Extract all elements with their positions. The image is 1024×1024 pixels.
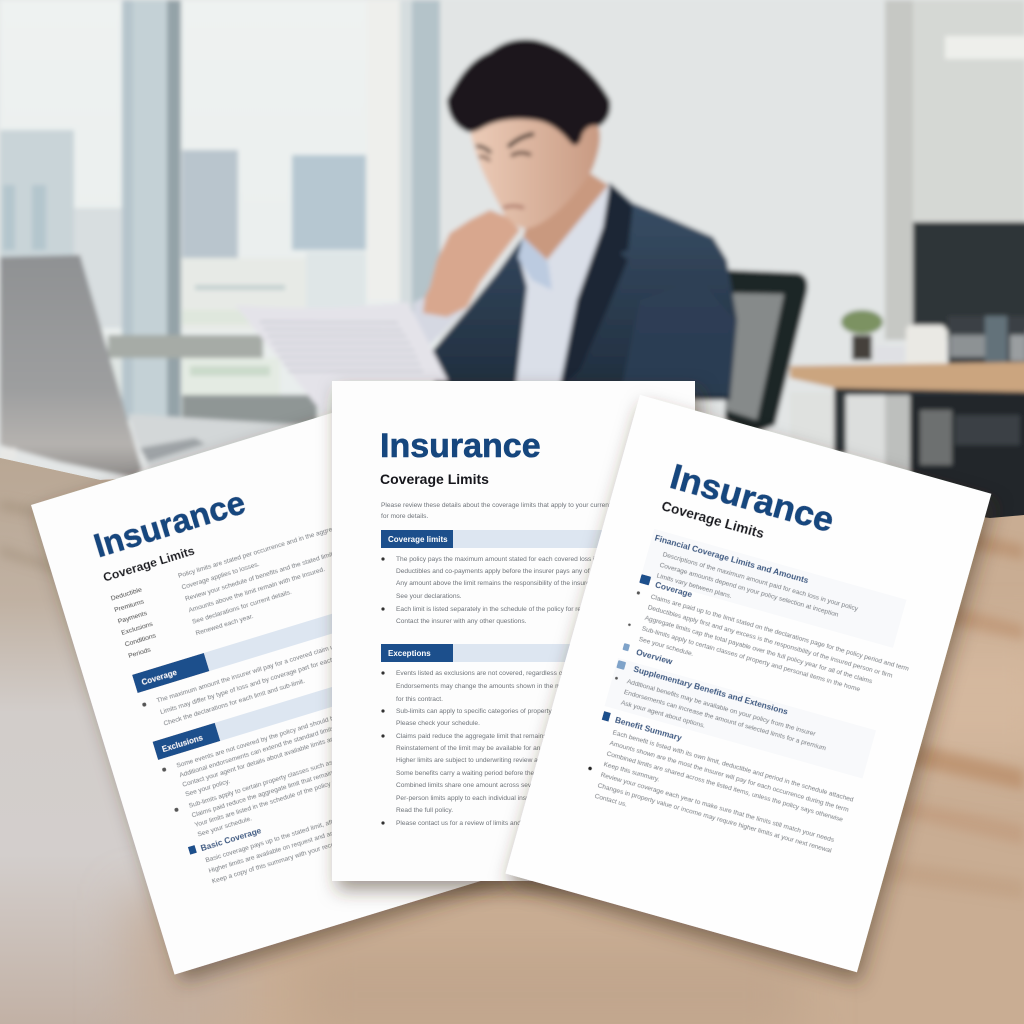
right document title: Insurance xyxy=(666,456,839,540)
left document section bar 2: Exclusions xyxy=(161,733,205,754)
left document summary table: Review your schedule of benefits and the stated limits for each of the insured items in the current policy term xyxy=(184,504,489,603)
right document section 1 text: Coverage amounts depend on your policy selection at inception xyxy=(659,562,840,619)
left document summary table: Premiums xyxy=(114,598,145,614)
centre document title: Insurance xyxy=(380,427,541,465)
left document section 1 text: Limits may differ by type of loss and by coverage part for each of the insured persons in the policy xyxy=(159,626,435,716)
centre document section 2 bullets: Events listed as exclusions are not covered, regardless of the limits in the policy and your schedule xyxy=(396,670,685,677)
centre document intro: for more details. xyxy=(381,513,428,520)
right document pale band 1 xyxy=(641,529,907,648)
left document section bar 1 xyxy=(132,588,423,693)
left document summary table: Renewed each year. xyxy=(195,613,255,637)
right document section 4 text xyxy=(581,726,855,867)
rear desk xyxy=(790,362,1024,527)
right document section 2 text: Claims are paid up to the limit stated on the declarations page for the policy period and term xyxy=(650,594,910,673)
right document section 2 text: Sub-limits apply to certain classes of property and personal items in the home xyxy=(641,625,861,693)
man: hand xyxy=(423,210,520,317)
right document section 4 text: Review your coverage each year to make sure that the limits still match your needs xyxy=(600,772,836,844)
centre document section 2 bullets: Per-person limits apply to each individual insured on the contract xyxy=(396,795,585,802)
right document section 2 text xyxy=(624,590,910,715)
centre document section 1 bullets: Any amount above the limit remains the responsibility of the insured person or company named here xyxy=(396,580,689,587)
centre document section bar 2: Exceptions xyxy=(388,649,431,658)
right document section 2 text: Aggregate limits cap the total payable over the full policy year for all of the claims xyxy=(644,615,874,686)
right document section 1 text: Limits vary between plans. xyxy=(656,572,733,600)
right document section 4 text: Contact us. xyxy=(594,793,628,809)
left document section 2 text xyxy=(161,663,525,843)
man: neck xyxy=(522,170,608,265)
right document icon heading: overview: Overview xyxy=(635,647,674,667)
right document section 3 text xyxy=(608,675,830,763)
centre document section 2 bullets: Endorsements may change the amounts shown in the main policy declarations for each year xyxy=(396,683,667,690)
left document summary table: Exclusions xyxy=(121,621,154,637)
table left glare xyxy=(0,458,200,1024)
centre document section 2 bullets: Please contact us for a review of limits and coverage terms. xyxy=(396,820,570,827)
right document section 4 text: Amounts shown are the most the insurer will pay for each occurrence during the term xyxy=(609,740,850,814)
left document summary table: Payments xyxy=(117,610,149,626)
man: shirt xyxy=(516,183,610,385)
right document section 4 text: Keep this summary. xyxy=(603,761,660,784)
centre document section 1 bullets xyxy=(381,556,721,625)
centre document section 1 bullets: Contact the insurer with any other questions. xyxy=(396,618,527,625)
right document section 2 text: See your schedule. xyxy=(638,636,694,658)
monitor on rear desk xyxy=(913,222,1024,330)
left document subtitle: Coverage Limits xyxy=(101,544,196,585)
centre document section 1 bullets: The policy pays the maximum amount stated for each covered loss in the period of insurance and for each item xyxy=(396,556,721,563)
right document icon heading: coverage: Coverage xyxy=(654,579,694,599)
centre document section 2 bullets: Reinstatement of the limit may be available for an added premium on the policy xyxy=(396,745,628,752)
left document summary table: Conditions xyxy=(124,632,157,648)
right document section 4 text: Each benefit is listed with its own limit, deductible and period in the schedule attached xyxy=(612,729,855,804)
left document section 2 text: Some events are not covered by the policy and should be reviewed before a claim is made to the insurer for payment xyxy=(176,663,504,770)
document: left xyxy=(31,376,596,975)
left document sub-heading: Basic Coverage xyxy=(199,825,263,853)
right document heading 2: Supplementary Benefits and Extensions xyxy=(632,664,790,717)
potted plant xyxy=(841,310,905,361)
centre document section bar 2 xyxy=(381,644,631,662)
left document closing text: Keep a copy of this summary with your records and review it each year xyxy=(211,818,412,885)
left document summary table: Policy limits are stated per occurrence and in the aggregate amount for each of the covered losses in the term xyxy=(177,479,486,580)
laptop xyxy=(0,255,320,490)
man: shirt cuff xyxy=(413,297,467,345)
centre document intro xyxy=(381,502,705,520)
left document closing text: Higher limits are available on request and are subject to underwriting review and terms of the insurer xyxy=(208,782,491,875)
centre document intro: Please review these details about the coverage limits that apply to your current insurance policy and your limits xyxy=(381,502,705,509)
right document section 4 text: Changes in property value or income may require higher limits at your next renewal xyxy=(597,782,833,855)
centre document section 1 bullets: Deductibles and co-payments apply before the insurer pays any of the remaining balance due on the claim xyxy=(396,568,707,575)
left document section 1 text: Check the declarations for each limit and sub-limit. xyxy=(163,678,306,728)
left document summary table xyxy=(109,479,504,660)
left document section 2 text: Contact your agent for details about available limits and options in your policy xyxy=(182,716,400,789)
right document section 3 text: Ask your agent about options. xyxy=(620,699,706,730)
centre document section bar 1: Coverage limits xyxy=(388,535,448,544)
man: suit xyxy=(433,183,737,400)
held paper xyxy=(235,302,448,416)
desk equipment under monitor xyxy=(948,316,1024,368)
centre document section 2 bullets: Read the full policy. xyxy=(396,807,453,814)
centre document section bar 1 xyxy=(381,530,631,548)
left document summary table: Coverage applies to losses. xyxy=(181,561,261,591)
wooden table xyxy=(0,458,1024,1024)
left document closing text: Basic coverage pays up to the stated limit, after the deductible has been met in full by the insured person xyxy=(205,768,499,864)
centre document section 2 bullets: Some benefits carry a waiting period before they take effect under the terms xyxy=(396,770,618,777)
man: eyes and mouth xyxy=(476,134,534,208)
centre document subtitle: Coverage Limits xyxy=(380,471,489,487)
table wood grain xyxy=(0,500,1024,900)
left document section 2 text: Sub-limits apply to certain property classes such as jewelry, electronics and fine art in your home xyxy=(188,721,460,810)
left document summary table: Amounts above the limit remain with the insured. xyxy=(188,566,326,614)
centre document section 2 bullets: Sub-limits can apply to specific categories of property and valuables in the home xyxy=(396,708,631,715)
man: hair xyxy=(447,39,611,145)
left document summary table: Periods xyxy=(128,646,152,660)
left document section 2 text: Your limits are listed in the schedule of the policy for your review at each renewal date xyxy=(194,749,435,829)
left document section 2 text: Claims paid reduce the aggregate limit that remains available in the current policy year and term xyxy=(191,731,461,819)
centre document section 2 bullets: Please check your schedule. xyxy=(396,720,480,727)
window with city view xyxy=(0,0,440,430)
man: face xyxy=(470,115,600,228)
left document section bar 2 xyxy=(153,655,443,760)
ceiling light xyxy=(945,36,1024,59)
right document section 1 text: Descriptions of the maximum amount paid for each loss in your policy xyxy=(662,551,859,613)
document: right xyxy=(506,395,991,972)
left document section 1 text: The maximum amount the insurer will pay for a covered claim under this policy section and for each insured person or item xyxy=(156,593,500,705)
right document section 3 text: Endorsements can increase the amount of selected limits for a premium xyxy=(623,689,827,752)
centre document section 1 bullets: See your declarations. xyxy=(396,593,462,600)
left document summary table: See declarations for current details. xyxy=(191,589,293,626)
left document title: Insurance xyxy=(90,483,249,564)
centre document section 1 bullets: Each limit is listed separately in the schedule of the policy for review by you and your agent now xyxy=(396,606,676,613)
right document heading 1: Financial Coverage Limits and Amounts xyxy=(654,533,810,585)
right document section 2 text: Deductibles apply first and any excess is the responsibility of the insured person or firm xyxy=(647,604,894,680)
man: shirt collar xyxy=(518,237,552,290)
right document section 4 text: Combined limits are shared across the listed items, unless the policy says otherwise xyxy=(606,750,844,824)
left document section 2 text: Additional endorsements can extend the standard limits at an added cost to the insured person or company xyxy=(179,681,480,779)
right document subtitle: Coverage Limits xyxy=(660,498,766,541)
mug xyxy=(906,325,946,373)
centre document section 2 bullets: Combined limits share one amount across several items on the policy schedule xyxy=(396,782,627,789)
centre document section 2 bullets: Higher limits are subject to underwriting review and approval by the insurer now xyxy=(396,757,628,764)
man: lapel xyxy=(563,183,633,385)
document: centre xyxy=(332,381,721,881)
table soft tone patches xyxy=(130,640,1024,1024)
office chair xyxy=(725,270,808,435)
right document icon heading: overview xyxy=(622,643,674,667)
left document summary table: Deductible xyxy=(110,586,143,603)
left document section bar 1: Coverage xyxy=(141,668,179,687)
left document section 2 text: See your policy. xyxy=(185,778,231,798)
centre document section 2 bullets: Claims paid reduce the aggregate limit that remains for the year in the policy term xyxy=(396,733,634,740)
right document pale band 2 xyxy=(605,658,876,779)
right document icon heading: benefit summary: Benefit Summary xyxy=(614,715,683,743)
back wall xyxy=(442,0,887,440)
centre document section 2 bullets xyxy=(381,670,685,827)
man: suit sleeve highlight xyxy=(620,280,735,395)
right document icon heading: coverage xyxy=(639,574,694,599)
right document section 3 text: Additional benefits may be available on your policy from the insurer xyxy=(626,678,817,738)
left document section 2 text: See your schedule. xyxy=(197,815,253,839)
centre document section 2 bullets: for this contract. xyxy=(396,696,443,703)
